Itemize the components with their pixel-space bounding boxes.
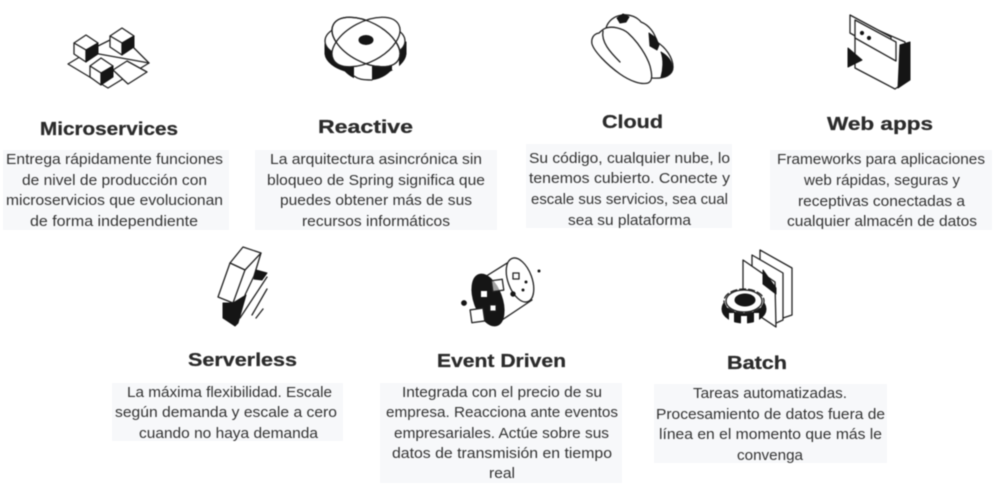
heading: Cloud: Cloud [602,112,663,132]
icon: isometric lightning bolt [218,247,267,326]
heading: Event Driven: Event Driven [437,351,566,371]
heading: Web apps: Web apps [827,114,933,134]
icon: isometric cloud [592,14,673,84]
card: Cloud [526,14,732,229]
text block: Batch description: Procesamiento de datos fuera de [656,407,885,423]
text block: Batch description [654,384,887,464]
text block: Serverless description: cuando no haya demanda [139,426,319,442]
text block: Web apps description: cualquier almacén de datos [787,214,977,230]
text block: Event Driven description: datos de transmisión en tiempo [392,446,612,462]
text block: Reactive description: bloqueo de Spring significa que [267,173,485,189]
text block: Event Driven description: real [489,466,515,482]
text block: Batch description: Tareas automatizadas. [693,386,847,402]
text block: Reactive description [255,150,497,230]
heading: Microservices: Microservices [40,119,178,139]
icon: event cylinder [462,254,540,330]
text block: Serverless description: La máxima flexibilidad. Escale [127,385,332,401]
heading: Reactive: Reactive [318,117,413,137]
text block: Web apps description [770,150,992,230]
text block: Web apps description: receptivas conectadas a [798,194,966,210]
card: Batch [654,250,887,464]
text block: Cloud description: sea su plataforma [568,213,692,229]
text block: Reactive description: recursos informáticos [302,214,450,230]
icon: gear and documents [722,250,792,327]
text block: Cloud description: escale sus servicios, sea cual [531,192,728,208]
card: Reactive [255,7,497,230]
card: Serverless [112,247,343,442]
text block: Serverless description [112,383,343,442]
text block: Event Driven description: Integrada con el precio de su [402,385,602,401]
card: Event Driven [380,254,622,483]
heading: Batch: Batch [727,353,787,373]
card: Web apps [770,15,992,230]
text block: Event Driven description: empresariales. Actúe sobre sus [394,426,609,442]
text block: Cloud description: tenemos cubierto. Conecte y [529,171,731,187]
text block: Event Driven description: empresa. Reacciona ante eventos [386,405,618,421]
text block: Cloud description: Su código, cualquier nube, lo [529,151,730,167]
text block: Cloud description [526,144,732,229]
text block: Batch description: convenga [737,448,804,464]
icon: reactive atom flower [324,7,408,81]
text block: Microservices description [3,150,229,230]
text block: Batch description: línea en el momento que más le [659,427,882,443]
heading: Serverless: Serverless [188,350,297,370]
text block: Microservices description: microservicios que evolucionan [6,193,223,209]
card: Microservices [3,28,229,230]
text block: Serverless description: según demanda y escale a cero [115,405,337,421]
text block: Microservices description: de forma independiente [30,214,198,230]
text block: Event Driven description [380,383,622,483]
icon: isometric cubes on plates [68,28,149,88]
text block: Reactive description: puedes obtener más de sus [280,193,472,209]
text block: Web apps description: Frameworks para aplicaciones [777,152,985,168]
text block: Microservices description: Entrega rápidamente funciones [6,152,223,168]
icon: browser windows with cursor [848,15,910,89]
text block: Reactive description: La arquitectura asincrónica sin [270,152,482,168]
text block: Microservices description: de nivel de producción con [22,173,207,189]
text block: Web apps description: web rápidas, seguras y [803,173,961,189]
